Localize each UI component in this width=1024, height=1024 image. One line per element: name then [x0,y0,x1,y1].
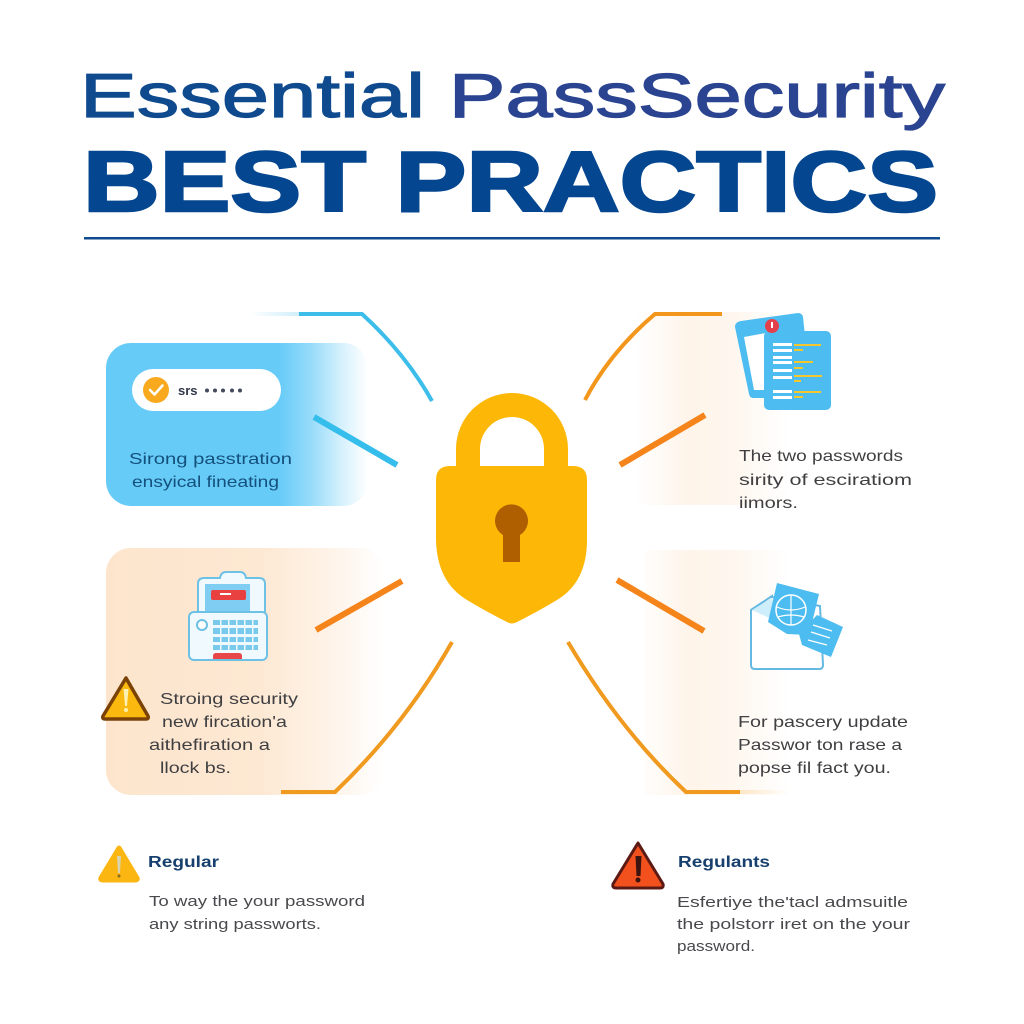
panel: password update [645,550,908,795]
panel: two passwords [635,312,912,512]
connector: orange lower right [568,642,790,794]
spoke: blue [314,417,397,465]
icon: envelope [751,583,843,669]
panel text [739,448,912,512]
icon: documents [735,313,831,410]
callout text: any string passworts. [149,916,321,933]
callout heading: Regular [148,854,219,871]
panel text: Passwor ton rase a [738,737,902,754]
callout text: To way the your password [149,893,365,910]
panel text [129,451,292,491]
callout: regular [101,848,365,933]
spoke: orange upper right [620,415,705,465]
panel text: aithefiration a [149,737,270,754]
title [80,62,945,230]
callout text: password. [677,938,755,955]
callout text [677,894,910,955]
panel text: llock bs. [160,760,231,777]
password field [132,369,281,411]
panel text: Stroing security [160,691,298,708]
icon: central padlock [436,393,587,624]
password field: srs [178,383,198,398]
icon: security keypad [189,572,267,660]
panel text: The two passwords [739,448,903,465]
callout text: the polstorr iret on the your [677,916,910,933]
callout heading: Regulants [678,854,770,871]
icon: yellow warning [101,848,137,880]
panel text: Sirong passtration [129,451,292,468]
panel text: iimors. [739,495,798,512]
spoke: orange lower right [617,580,704,631]
connector: blue top [250,312,432,401]
callout text [149,893,365,933]
connector: orange upper right [585,314,722,400]
panel text: new fircation'a [162,714,287,731]
connector: orange lower left [281,642,452,792]
panel text: sirity of esciratiom [739,472,912,489]
callout: regulants [613,843,910,955]
panel text: popse fil fact you. [738,760,891,777]
spoke: orange lower left [316,581,402,630]
panel text: For pascery update [738,714,908,731]
title line 1: Essential PassSecurity [80,62,945,131]
panel text [738,714,908,777]
callout text: Esfertiye the'tacl admsuitle [677,894,908,911]
icon: red warning [613,843,663,888]
panel text: ensyical fineating [132,474,279,491]
panel: strong password [106,343,368,506]
panel: authentication [103,548,385,795]
title line 2: BEST PRACTICS [83,135,938,230]
panel text [149,691,298,777]
icon: warning [103,678,148,719]
